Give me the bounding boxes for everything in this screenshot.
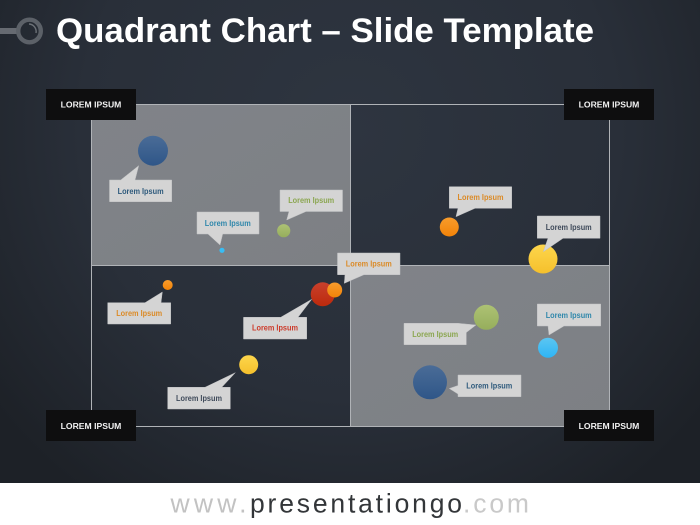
corner label: top left: LOREM IPSUM — [61, 100, 121, 110]
title: Quadrant Chart – Slide Template — [56, 12, 594, 50]
corner label: bottom left — [46, 410, 136, 441]
panel: bottom-right quadrant — [350, 266, 610, 426]
footer website text: presentationgo — [250, 488, 462, 518]
bubble: red — [311, 282, 335, 306]
callout: orange top right — [449, 187, 512, 217]
callout: orange centre: Lorem Ipsum — [346, 260, 392, 268]
bubble: large blue, top left — [138, 136, 168, 166]
bubble: small orange — [163, 280, 173, 290]
callout: orange bottom left: Lorem Ipsum — [116, 309, 162, 318]
callout: orange bottom left — [108, 292, 171, 324]
icon: logo ring — [0, 20, 41, 42]
callout: green top — [280, 190, 342, 220]
callout: green bottom right: Lorem Ipsum — [412, 330, 458, 339]
footer website text — [170, 488, 529, 518]
callout: light blue right: Lorem Ipsum — [546, 311, 592, 320]
bubble: light blue right — [538, 338, 558, 358]
panel: quadrant chart — [92, 104, 610, 426]
corner label: bottom right — [564, 410, 654, 441]
callout: light blue right — [537, 304, 601, 335]
bubble: large blue bottom — [413, 365, 447, 399]
bubble: small green — [277, 224, 290, 237]
corner label: top right: LOREM IPSUM — [579, 100, 639, 110]
callout: blue bottom right — [449, 375, 521, 397]
callout: yellow right: Lorem Ipsum — [546, 223, 592, 232]
footer website text: www. — [170, 488, 246, 518]
footer website text: .com — [463, 488, 529, 518]
panel: top-left quadrant — [92, 104, 350, 266]
callout: yellow right — [537, 216, 600, 252]
quadrant grid lines — [92, 104, 610, 426]
bubble: yellow bottom — [239, 355, 258, 374]
bubble: green large — [474, 305, 499, 330]
callout: blue top left: Lorem Ipsum — [118, 187, 164, 196]
footer band — [0, 483, 700, 525]
corner label: top left — [46, 89, 136, 120]
callout: blue bottom right: Lorem Ipsum — [466, 381, 512, 390]
callout: orange centre — [338, 253, 400, 283]
callout: yellow bottom: Lorem Ipsum — [176, 394, 222, 403]
corner label: bottom left: LOREM IPSUM — [61, 421, 121, 431]
corner label: bottom right: LOREM IPSUM — [579, 421, 639, 431]
corner label: top right — [564, 89, 654, 120]
bubble: tiny light blue — [219, 248, 225, 253]
callout: green bottom right — [404, 323, 476, 345]
callout: light blue — [197, 212, 259, 245]
bubble: yellow right — [528, 244, 558, 274]
callout: blue top left — [110, 166, 172, 202]
bubble: orange over red — [327, 282, 342, 298]
callout: red: Lorem Ipsum — [252, 324, 298, 332]
callout: light blue: Lorem Ipsum — [205, 219, 251, 228]
callout: red — [244, 299, 312, 339]
callout: yellow bottom — [168, 373, 235, 409]
callout: green top: Lorem Ipsum — [288, 196, 334, 205]
bubble: orange top right — [440, 218, 459, 236]
callout: orange top right: Lorem Ipsum — [458, 193, 504, 202]
